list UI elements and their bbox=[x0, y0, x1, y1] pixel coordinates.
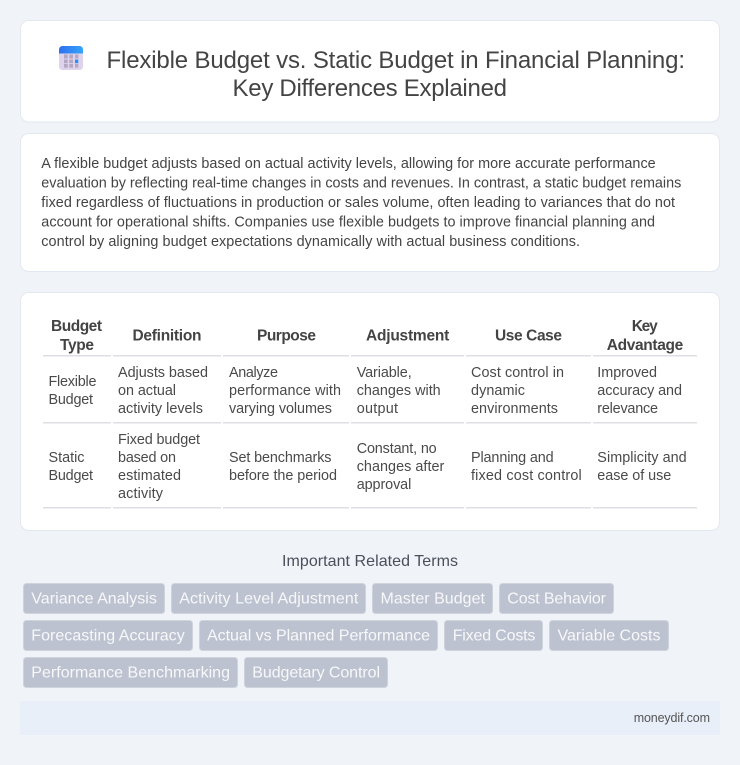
table row: flexible budget: on actual bbox=[118, 383, 176, 399]
table row: static budget: estimated bbox=[118, 468, 181, 484]
table header row: Purpose bbox=[257, 328, 316, 344]
table header row: Adjustment bbox=[366, 328, 449, 344]
table row: flexible budget: varying volumes bbox=[229, 401, 332, 417]
tag: fixed costs bbox=[444, 620, 542, 650]
table row: flexible budget: Budget bbox=[48, 392, 93, 408]
table row: flexible budget bbox=[48, 365, 682, 417]
table row: flexible budget: Adjusts based bbox=[118, 365, 208, 381]
table header row: Type bbox=[60, 337, 94, 354]
heading: important related terms: Important Related Terms bbox=[282, 553, 458, 570]
table row: flexible budget: relevance bbox=[597, 401, 658, 417]
text block: summary: evaluation by reflecting real-time changes in costs and revenues. In contrast, a static budget remains bbox=[41, 176, 681, 192]
title: Key Differences Explained bbox=[232, 75, 507, 102]
table row: flexible budget: Cost control in bbox=[471, 365, 564, 381]
tag: forecasting accuracy: Forecasting Accuracy bbox=[31, 628, 185, 644]
tag: fixed costs: Fixed Costs bbox=[453, 628, 535, 644]
table header row bbox=[51, 318, 684, 354]
table row: static budget: fixed cost control bbox=[471, 468, 582, 484]
table row: static budget bbox=[48, 432, 687, 502]
title bbox=[106, 47, 685, 102]
table row: flexible budget: Variable, bbox=[357, 365, 412, 381]
panel: header bbox=[20, 20, 720, 122]
text block: summary: A flexible budget adjusts based on actual activity levels, allowing for more accurate performance bbox=[41, 156, 656, 172]
table row: flexible budget: output bbox=[357, 401, 398, 417]
tag: cost behavior bbox=[500, 584, 614, 614]
tag: activity level adjustment: Activity Level Adjustment bbox=[179, 590, 359, 608]
table row: flexible budget: environments bbox=[471, 401, 558, 417]
tag: master budget bbox=[372, 584, 492, 614]
table header row: Budget bbox=[51, 318, 102, 335]
table row: flexible budget: accuracy and bbox=[597, 383, 682, 399]
table header row: Definition bbox=[132, 328, 202, 344]
tag: actual vs planned performance bbox=[200, 620, 438, 650]
table row: flexible budget: dynamic bbox=[471, 383, 525, 399]
tag: master budget: Master Budget bbox=[380, 590, 486, 608]
table row: flexible budget: performance with bbox=[229, 383, 341, 399]
table row: static budget: approval bbox=[357, 477, 411, 493]
table row: static budget: Static bbox=[48, 450, 84, 466]
table header row: Advantage bbox=[607, 337, 684, 354]
tag: variable costs: Variable Costs bbox=[558, 628, 660, 644]
table row: static budget: based on bbox=[118, 450, 176, 466]
tag: activity level adjustment bbox=[172, 584, 366, 614]
table row: static budget: Set benchmarks bbox=[229, 450, 332, 466]
tag: cost behavior: Cost Behavior bbox=[507, 590, 607, 608]
table row: static budget: Simplicity and bbox=[597, 450, 687, 466]
table row: flexible budget: activity levels bbox=[118, 401, 203, 417]
table header row: Key bbox=[632, 318, 658, 335]
panel: comparison table bbox=[20, 292, 720, 530]
table row: static budget: Fixed budget bbox=[118, 432, 200, 448]
tag: performance benchmarking: Performance Benchmarking bbox=[31, 664, 230, 682]
tag: budgetary control bbox=[244, 658, 388, 688]
text block: summary: fixed regardless of fluctuations in production or sales volume, often leading to variances that do not bbox=[41, 195, 675, 211]
tag: budgetary control: Budgetary Control bbox=[252, 664, 380, 682]
title: Flexible Budget vs. Static Budget in Financial Planning: bbox=[106, 47, 685, 74]
footer: moneydif.com bbox=[634, 711, 710, 725]
text block: summary: account for operational shifts. Companies use flexible budgets to improve financial planning and bbox=[41, 214, 655, 230]
related term tags bbox=[24, 584, 668, 688]
panel: summary paragraph bbox=[20, 134, 720, 272]
table row: static budget: before the period bbox=[229, 468, 337, 484]
table row: static budget: ease of use bbox=[597, 468, 671, 484]
table header row: Use Case bbox=[495, 328, 562, 344]
table row: static budget: Constant, no bbox=[357, 441, 437, 457]
table row: static budget: Planning and bbox=[471, 450, 554, 466]
footer bbox=[20, 701, 720, 735]
text block: summary: control by aligning budget expectations dynamically with actual business conditions. bbox=[41, 234, 580, 250]
tag: variance analysis: Variance Analysis bbox=[31, 590, 157, 608]
tag: variance analysis bbox=[24, 584, 164, 614]
table row: flexible budget: Improved bbox=[597, 365, 657, 381]
table row: static budget: Budget bbox=[48, 468, 93, 484]
tag: forecasting accuracy bbox=[24, 620, 192, 650]
tag: variable costs bbox=[550, 620, 668, 650]
table row: flexible budget: changes with bbox=[357, 383, 441, 399]
text block: summary bbox=[41, 156, 681, 250]
table row: flexible budget: Flexible bbox=[48, 374, 96, 390]
tag: performance benchmarking bbox=[24, 658, 238, 688]
icon: calendar bbox=[59, 46, 83, 70]
tag: actual vs planned performance: Actual vs Planned Performance bbox=[207, 628, 430, 644]
table row: static budget: changes after bbox=[357, 459, 445, 475]
table row: static budget: activity bbox=[118, 486, 164, 502]
table row: flexible budget: Analyze bbox=[229, 365, 278, 381]
